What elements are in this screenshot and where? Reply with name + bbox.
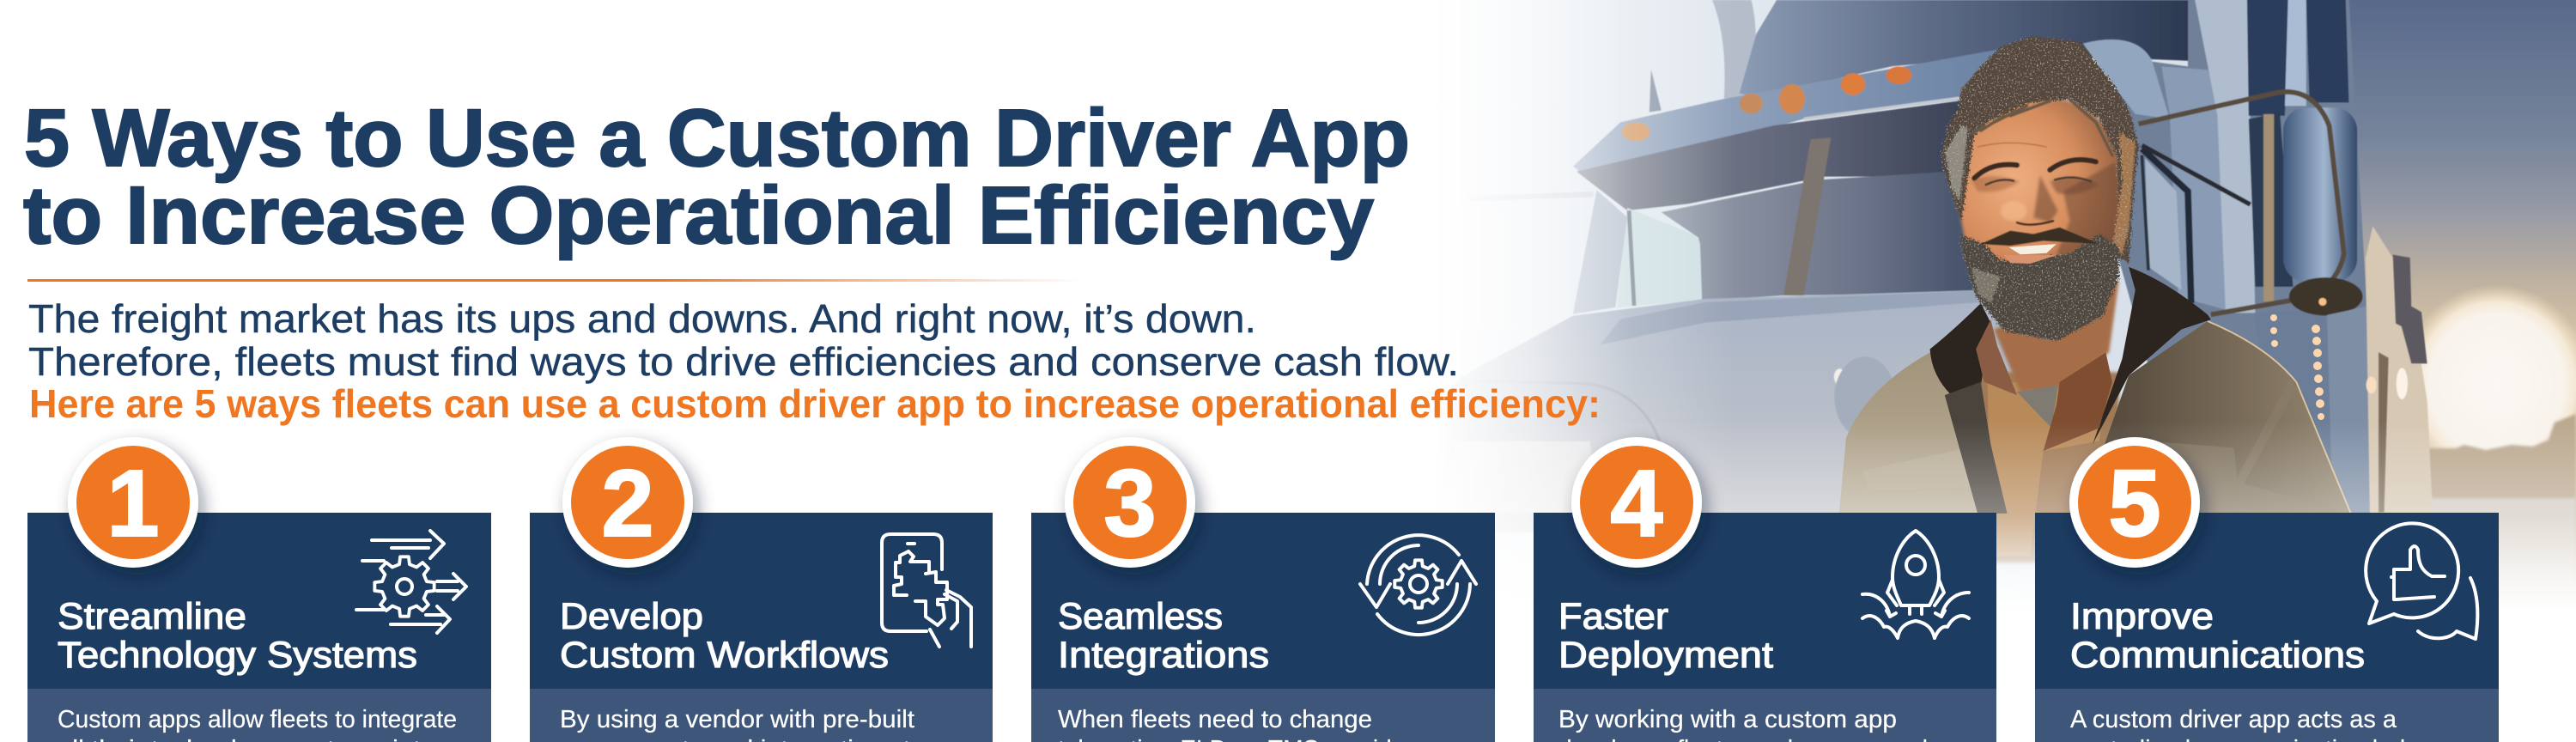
icon: phone with puzzle and hand: [882, 534, 971, 647]
card 2 heading: Custom Workflows: [560, 635, 889, 676]
beard: [1959, 234, 2119, 341]
card 3 heading: [1058, 596, 1269, 676]
smile: [2008, 244, 2057, 254]
number badge 5: [2069, 437, 2200, 568]
card 3 body: [1058, 706, 1419, 742]
right sky with sunrise: [2267, 0, 2576, 618]
number badge 2: [562, 437, 693, 568]
card 2 heading: Develop: [560, 596, 703, 637]
panel: card 2 develop custom workflows: [530, 437, 993, 742]
t-shirt: [2017, 386, 2058, 428]
hood collar: [1930, 267, 2211, 514]
forehead hair strands: [1972, 100, 2112, 155]
icon: gear with arrows: [356, 531, 466, 633]
card 1 heading: [58, 596, 417, 676]
card 3 heading: Integrations: [1058, 635, 1269, 676]
card 1 heading: Technology Systems: [58, 635, 417, 676]
icon: cycle arrows with gear: [1360, 535, 1476, 635]
title divider: [27, 279, 1084, 282]
card 5 heading: Improve: [2070, 596, 2214, 637]
torso base: [1978, 372, 2119, 563]
card 5 body: A custom driver app acts as a: [2070, 706, 2397, 733]
truck driver portrait: [1837, 37, 2359, 563]
left fade to white: [1391, 0, 1735, 618]
card 1 body: Custom apps allow fleets to integrate: [58, 706, 457, 733]
intro text: Here are 5 ways fleets can use a custom driver app to increase operational efficiency:: [29, 381, 1601, 426]
intro text: The freight market has its ups and downs. And right now, it’s down.: [28, 296, 1256, 341]
card 2 body: By using a vendor with pre-built: [560, 706, 914, 733]
icon: chat bubbles with thumbs up: [2366, 523, 2477, 639]
number badge 1: [68, 437, 198, 568]
shirt collar: [1976, 319, 2112, 451]
icon: rocket launch: [1862, 531, 1969, 638]
panel: card 1 streamline technology systems: [27, 437, 491, 742]
number badge 3: [1065, 437, 1195, 568]
brows and eyes: [1974, 143, 2096, 225]
number badge 5: 5: [2108, 451, 2161, 556]
panel: card 3 seamless integrations: [1031, 437, 1495, 742]
card 4 heading: Faster: [1558, 596, 1668, 637]
number badge 4: [1571, 437, 1702, 568]
face: [1957, 98, 2125, 280]
LED marker dots: [2270, 314, 2324, 420]
card 5 heading: Communications: [2070, 635, 2365, 676]
intro text: Therefore, fleets must find ways to drive efficiencies and conserve cash flow.: [28, 339, 1459, 384]
sky background: [1408, 0, 2576, 618]
panel: card 5 improve communications: [2035, 437, 2499, 742]
card 5 heading: [2070, 596, 2365, 676]
title: 5 Ways to Use a Custom Driver App: [24, 93, 1410, 184]
amber cab lights: [1621, 66, 1911, 141]
card 3 heading: Seamless: [1058, 596, 1223, 637]
number badge 3: 3: [1103, 451, 1157, 556]
title: to Increase Operational Efficiency: [23, 170, 1374, 261]
neck: [1994, 280, 2119, 392]
title: [23, 93, 1410, 261]
card 4 heading: Deployment: [1558, 635, 1773, 676]
card 4 heading: [1558, 596, 1773, 676]
shirt: [1988, 375, 2109, 556]
hair: [1941, 37, 2139, 264]
card 2 heading: [560, 596, 889, 676]
number badge 4: 4: [1610, 451, 1663, 556]
card 1 heading: Streamline: [58, 596, 246, 637]
panel: card 4 faster deployment: [1534, 437, 1996, 742]
bottom fade to white: [1391, 421, 2576, 611]
background photo: truck and driver at sunrise: [1391, 0, 2576, 742]
intro text: [28, 296, 1601, 426]
moustache: [1981, 228, 2099, 246]
card 4 body: By working with a custom app: [1558, 706, 1897, 733]
card 3 body: When fleets need to change: [1058, 706, 1372, 733]
truck side, door and mirror: [2083, 0, 2388, 674]
number badge 1: 1: [106, 451, 160, 556]
number badge 2: 2: [601, 451, 654, 556]
truck cab: [1417, 0, 2197, 532]
trailer side: [2327, 226, 2433, 515]
jacket: [1837, 321, 2359, 556]
card 4 body: [1558, 706, 1928, 742]
